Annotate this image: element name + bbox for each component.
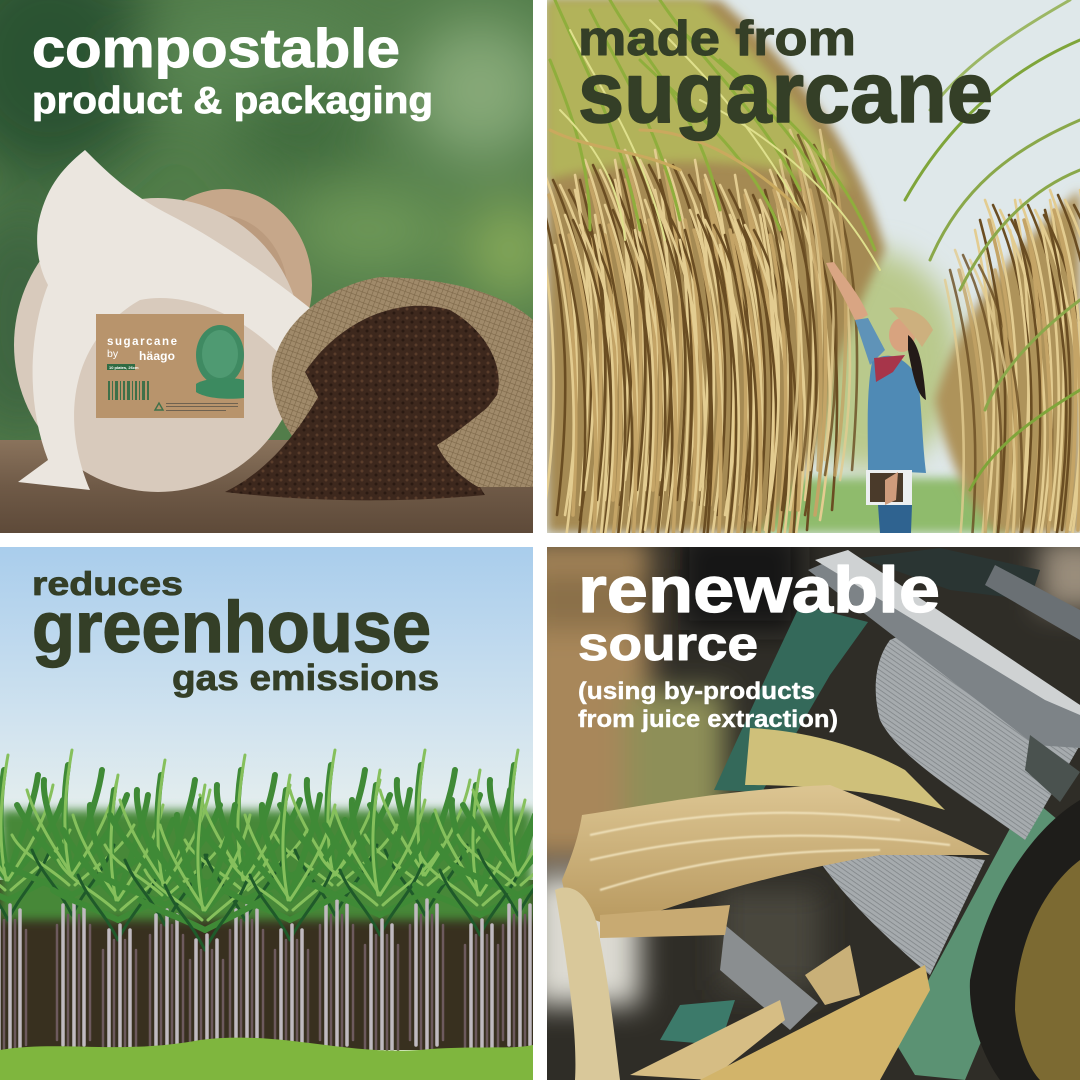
product label xyxy=(96,314,244,418)
product label: by xyxy=(107,348,119,360)
green machine frame xyxy=(660,548,1070,1080)
right sugarcane grass mass xyxy=(903,0,1080,533)
note: using by-products: (using by-products xyxy=(578,678,815,705)
panel: made from sugarcane xyxy=(547,0,1080,533)
table top xyxy=(0,440,533,533)
background: blurred workshop xyxy=(520,530,1080,1080)
product label: 10 plates, 26cm xyxy=(109,365,139,370)
crushed sugarcane stalks xyxy=(555,728,990,1080)
heading: source: source xyxy=(578,617,758,670)
black gear wheel xyxy=(970,800,1080,1080)
heading: renewable: renewable xyxy=(578,553,940,626)
sack of soil xyxy=(225,277,533,500)
heading: greenhouse: greenhouse xyxy=(32,588,431,668)
heading: sugarcane: sugarcane xyxy=(578,45,993,141)
panel: renewable source xyxy=(520,530,1080,1080)
panel: reduces greenhouse gas emissions xyxy=(0,547,583,1080)
subheading: product and packaging: product & packaging xyxy=(32,80,433,122)
plastic compostable wrap xyxy=(18,150,330,490)
background: sky and meadow xyxy=(547,0,1080,533)
heading: made from: made from xyxy=(578,12,856,66)
background: blurred foliage xyxy=(0,0,533,440)
note: from juice extraction: from juice extraction) xyxy=(578,706,838,733)
product label: häago xyxy=(139,349,175,363)
heading: gas emissions: gas emissions xyxy=(172,657,439,698)
grass foreground xyxy=(0,1038,533,1080)
sky background xyxy=(0,547,533,827)
heading: reduces: reduces xyxy=(32,565,183,602)
metal rollers xyxy=(720,550,1080,1030)
compostable plates xyxy=(14,189,312,492)
sugarcane field xyxy=(0,748,533,1051)
heading: compostable: compostable xyxy=(32,17,400,79)
product label: sugarcane xyxy=(107,336,177,348)
woman in denim shirt holding tablet xyxy=(826,262,933,533)
panel: compostable product and packaging xyxy=(0,0,550,533)
left sugarcane grass mass xyxy=(535,0,885,565)
